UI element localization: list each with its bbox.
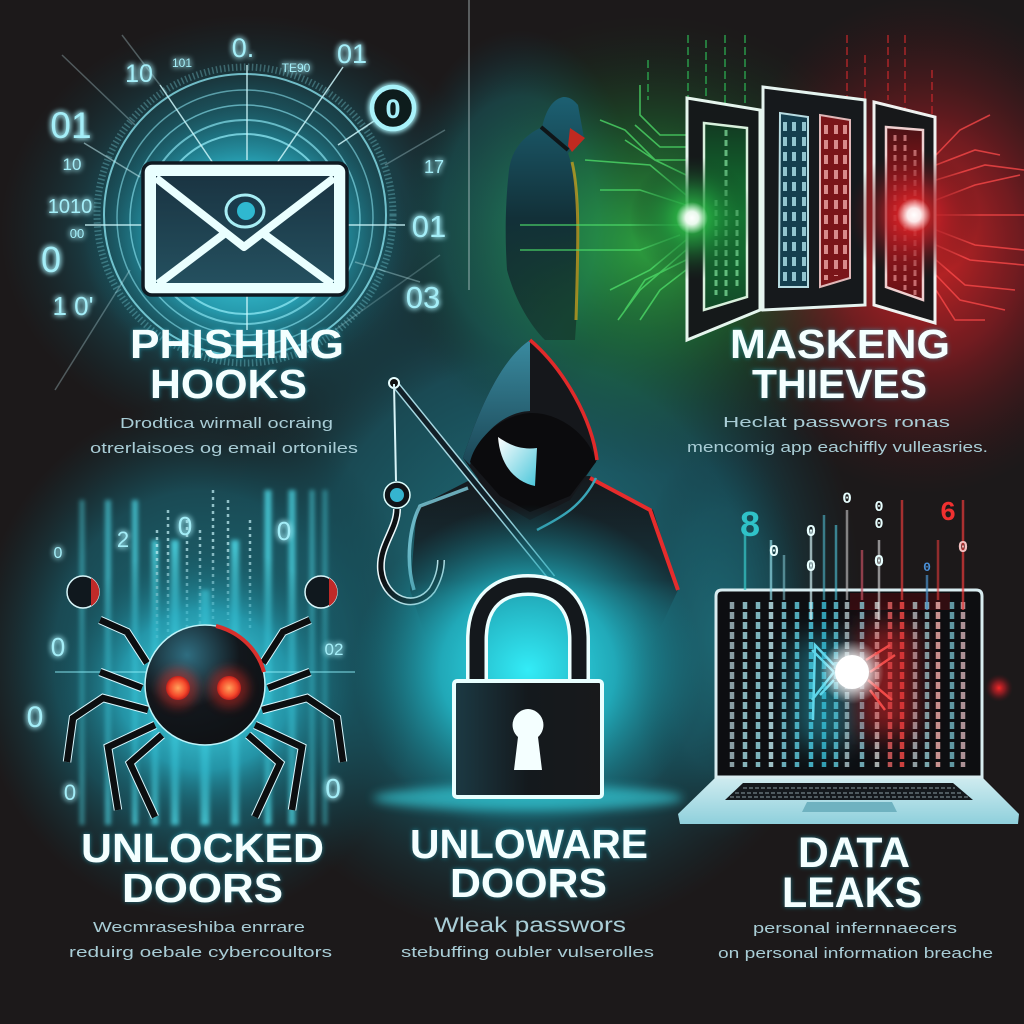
icon: envelope bbox=[143, 163, 347, 295]
heading: masking thieves: MASKENG bbox=[730, 321, 950, 367]
heading: phishing hooks: PHISHING bbox=[130, 321, 344, 367]
icon: circuit traces red bbox=[936, 115, 1024, 320]
icon: orb right bbox=[305, 576, 337, 608]
binary digits around envelope: TE90 bbox=[282, 61, 311, 75]
panel: center hacker and padlock bbox=[353, 340, 703, 961]
icon: laptop bbox=[678, 590, 1019, 824]
binary digits around spider: 0 bbox=[27, 701, 43, 734]
text: unloware description: stebuffing oubler vulserolles bbox=[401, 944, 654, 961]
text: masking description: mencomig app eachiffly vulleasries. bbox=[687, 439, 988, 456]
green light burst bbox=[630, 156, 754, 280]
heading: data leaks bbox=[782, 829, 922, 917]
icon: orb left bbox=[67, 576, 99, 608]
heading: unlocked doors bbox=[81, 825, 324, 911]
binary digits around envelope bbox=[41, 33, 446, 321]
binary digits around envelope: 0. bbox=[232, 33, 254, 63]
falling digits: 0 bbox=[874, 553, 884, 572]
data rain dashes bbox=[157, 490, 250, 640]
binary digits around envelope: 01 bbox=[50, 105, 92, 146]
icon: ring zero bbox=[372, 87, 414, 129]
text: masking description bbox=[687, 414, 988, 456]
text: unlocked description bbox=[69, 919, 332, 961]
panel divider line bbox=[468, 0, 470, 290]
heading: data leaks: DATA bbox=[798, 829, 910, 877]
panel: data leaks bbox=[678, 490, 1019, 962]
heading: data leaks: LEAKS bbox=[782, 869, 922, 917]
falling digits: 0 bbox=[923, 560, 931, 575]
text: phishing description bbox=[90, 415, 358, 457]
falling digits: 0 bbox=[958, 539, 968, 558]
panel: masking thieves bbox=[506, 35, 1024, 456]
text: unlocked description: Wecmraseshiba enrrare bbox=[93, 919, 305, 936]
heading: phishing hooks bbox=[130, 321, 344, 407]
icon: white mask bbox=[498, 437, 537, 486]
figure: masked thief bbox=[506, 97, 585, 340]
falling digits: 0 bbox=[806, 558, 816, 577]
binary digits around envelope: 17 bbox=[424, 157, 444, 177]
text: data leaks description bbox=[718, 920, 993, 962]
binary digits around spider: 0 bbox=[325, 773, 341, 804]
red light burst bbox=[848, 149, 980, 281]
binary digits around envelope: 101 bbox=[172, 56, 192, 70]
heading: unloware doors bbox=[410, 821, 648, 906]
falling digits: 0 bbox=[874, 516, 884, 533]
laptop base bbox=[678, 777, 1019, 824]
text: data leaks description: on personal information breache bbox=[718, 945, 993, 962]
text: phishing description: otrerlaisoes og email ortoniles bbox=[90, 440, 358, 457]
falling digits: 0 bbox=[806, 523, 816, 542]
falling digits: 8 bbox=[739, 506, 761, 547]
figure: hooded hacker bbox=[409, 340, 678, 650]
falling digits: 6 bbox=[940, 499, 956, 529]
panel: phishing hooks bbox=[41, 33, 446, 457]
text: unloware description: Wleak passwors bbox=[434, 914, 626, 937]
center door panel bbox=[763, 87, 865, 310]
text: phishing description: Drodtica wirmall ocraing bbox=[120, 415, 333, 432]
panel: unlocked doors bbox=[27, 490, 360, 961]
falling digits: 0 bbox=[769, 543, 779, 562]
binary digits around spider bbox=[27, 511, 343, 805]
falling digits: 0 bbox=[842, 490, 852, 508]
laptop screen bbox=[716, 590, 982, 777]
text: unlocked description: reduirg oebale cybercoultors bbox=[69, 944, 332, 961]
text: data leaks description: personal infernnaecers bbox=[753, 920, 957, 937]
binary digits around envelope: 1010 bbox=[48, 196, 92, 218]
binary digits around spider: 0 bbox=[64, 780, 76, 805]
binary digits around spider: 0 bbox=[51, 632, 65, 662]
falling digits: 0 bbox=[874, 499, 884, 516]
horizontal light streak bbox=[55, 671, 355, 673]
icon: breach burst bbox=[812, 640, 895, 720]
right door panel bbox=[874, 102, 935, 323]
text: unloware description bbox=[401, 914, 654, 961]
binary digits around envelope: 1 0' bbox=[52, 291, 94, 321]
binary digits around envelope: 01 bbox=[412, 209, 446, 244]
red spark bbox=[985, 674, 1013, 702]
data rain glow bars bbox=[82, 490, 325, 825]
binary columns bbox=[732, 602, 963, 767]
left door panel bbox=[687, 98, 760, 340]
data rain: green bbox=[648, 35, 745, 105]
falling digits bbox=[739, 490, 968, 577]
icon: fishing rod and hook bbox=[381, 378, 552, 601]
icon: keyhole bbox=[513, 709, 543, 770]
icon: eye on envelope bbox=[226, 195, 264, 227]
data rain above laptop bbox=[745, 500, 963, 620]
heading: masking thieves bbox=[730, 321, 950, 407]
heading: masking thieves: THIEVES bbox=[752, 361, 927, 407]
heading: phishing hooks: HOOKS bbox=[150, 361, 307, 407]
binary digits around envelope: 03 bbox=[406, 280, 440, 315]
heading: unlocked doors: DOORS bbox=[122, 865, 283, 911]
binary digits around envelope: 10 bbox=[125, 60, 153, 88]
icon: padlock bbox=[353, 505, 703, 835]
binary digits around envelope: 0 bbox=[41, 239, 61, 280]
binary digits around spider: 0 bbox=[178, 511, 192, 541]
icon: radial cyber circle bbox=[55, 35, 445, 390]
heading: unloware doors: DOORS bbox=[450, 860, 607, 906]
heading: unlocked doors: UNLOCKED bbox=[81, 825, 324, 871]
icon: spider bbox=[67, 576, 343, 817]
glow behind spider bbox=[50, 545, 360, 835]
screen glow overlay bbox=[795, 625, 915, 745]
heading: unloware doors: UNLOWARE bbox=[410, 821, 648, 867]
binary digits around envelope: 00 bbox=[70, 226, 84, 241]
data rain: red bbox=[847, 35, 932, 115]
icon: circuit traces green bbox=[520, 85, 686, 320]
binary digits around envelope: 01 bbox=[337, 39, 367, 69]
binary digits around spider: 0 bbox=[54, 545, 63, 562]
binary digits around spider: 2 bbox=[117, 527, 129, 552]
icon: ring zero: 0 bbox=[385, 94, 401, 124]
binary digits around envelope: 10 bbox=[63, 155, 81, 174]
icon: spider eyes bbox=[158, 668, 249, 708]
binary digits around spider: 02 bbox=[325, 640, 343, 659]
binary digits around spider: 0 bbox=[277, 516, 291, 546]
text: masking description: Heclat passwors ronas bbox=[723, 414, 950, 431]
